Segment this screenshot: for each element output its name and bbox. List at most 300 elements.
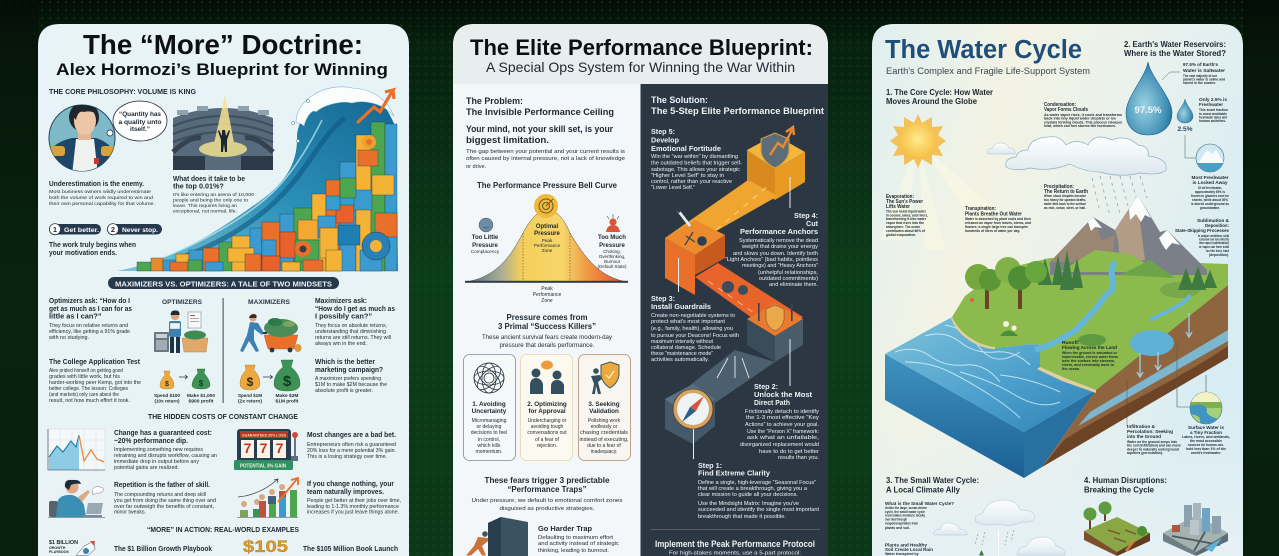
chart: performance pressure bell curve: Choking, bbox=[603, 249, 621, 254]
pill: never stop: 2 bbox=[111, 225, 115, 234]
text: step 3: Create non-negotiable systems to bbox=[651, 313, 735, 319]
callout: freshwater: This scant fraction bbox=[1199, 108, 1228, 112]
title: Elite Performance Blueprint: The Elite Performance Blueprint: bbox=[470, 35, 813, 60]
text: step 2: disorganized replacement would bbox=[740, 442, 819, 448]
text: step 1: Define a single, high-leverage “Seasonal Focus” bbox=[698, 480, 816, 486]
text: surface water tiny fraction: Surface Water is bbox=[1188, 425, 1224, 431]
chart: performance pressure bell curve: Complacency bbox=[471, 249, 500, 254]
text: step 5: “Lower Level Self.” bbox=[651, 185, 695, 191]
text: infiltration and percolation: Infiltration & bbox=[1127, 424, 1155, 430]
card: optimizing for approval: rejection. bbox=[537, 443, 557, 449]
text: peak performance protocol: Implement the Peak Performance Protocol bbox=[655, 539, 815, 549]
text: better marketing campaign: marketing campaign? bbox=[315, 365, 383, 374]
text: locked away bbox=[1191, 175, 1229, 210]
text: maximizers ask: “How do I get as much as bbox=[315, 304, 395, 313]
heading: the solution bbox=[651, 95, 824, 116]
card: avoiding uncertainty: Micromanaging bbox=[472, 418, 507, 424]
heading: primal success killers: 3 Primal “Success Killers” bbox=[498, 322, 596, 331]
text: motivation bbox=[49, 242, 136, 257]
illustration: mountains bbox=[1050, 195, 1207, 278]
title: The More Doctrine bbox=[56, 29, 388, 79]
labels: spend 1M make 2M: $1M profit bbox=[276, 398, 299, 404]
text: sublimation and deposition: into vapor (sublimation) bbox=[1199, 241, 1230, 245]
card: avoiding uncertainty: in control, bbox=[478, 437, 500, 443]
text: repetition bbox=[114, 480, 216, 516]
text: maximizers ask bbox=[315, 296, 395, 347]
text: step 5: Emotional Fortitude bbox=[651, 144, 721, 153]
text: maximizers ask: understanding that diminishing bbox=[315, 329, 386, 335]
text: step 5: control, rather than your reactive bbox=[651, 179, 732, 185]
text: step 3: activities automatically. bbox=[651, 357, 709, 363]
text: peak performance protocol bbox=[655, 539, 815, 556]
title: The Water Cycle bbox=[885, 36, 1090, 76]
illustration: conifers bbox=[1038, 250, 1217, 290]
heading: primal success killers bbox=[482, 313, 612, 349]
heading: performance traps: disguised as productive strategies. bbox=[500, 506, 595, 512]
text: step 4: meetings) and “Heavy Anchors” bbox=[742, 263, 818, 269]
card: avoiding uncertainty: Uncertainty bbox=[472, 408, 507, 415]
labels: spend 1M make 2M: Spend $1M bbox=[238, 393, 262, 398]
text: evaporation: contributes about 86% of bbox=[886, 229, 926, 233]
text: what is small water cycle: What is the Small Water Cycle? bbox=[885, 501, 954, 506]
labels: spend 1M make 2M: Make $2M bbox=[276, 393, 299, 398]
label: optimizers: OPTIMIZERS bbox=[162, 299, 202, 306]
connector lines bbox=[678, 177, 790, 459]
text: step 4: Cut bbox=[806, 219, 819, 228]
text: maximizers ask: They focus on absolute returns, bbox=[315, 323, 387, 329]
text: college application test: result, not how much effort it took. bbox=[49, 398, 130, 404]
icon: glacier circle bbox=[1196, 144, 1224, 173]
label: maximizers: MAXIMIZERS bbox=[248, 299, 290, 306]
text: bad bet: Most changes are a bad bet. bbox=[307, 430, 396, 439]
text: maximizers ask: I possibly can?” bbox=[315, 312, 372, 320]
icon: dagger and bomb bbox=[675, 207, 707, 246]
heading: human disruptions: 4. Human Disruptions: bbox=[1084, 476, 1167, 485]
text: precipitation: water falls back to the surface bbox=[1043, 202, 1086, 206]
card: optimizing for approval: Undercharging or bbox=[528, 418, 567, 424]
text: team improves: leading to 1-1.3% monthly performance bbox=[307, 504, 399, 510]
panel: The Elite Performance Blueprint bbox=[453, 24, 828, 556]
card: avoiding uncertainty: momentum. bbox=[476, 449, 502, 455]
pill: get better: Get better. bbox=[64, 227, 99, 234]
card: avoiding uncertainty: or delaying bbox=[477, 424, 502, 430]
text: precipitation: When cloud droplets become bbox=[1044, 194, 1086, 198]
text: surface water tiny fraction: a Tiny Fraction bbox=[1190, 430, 1222, 436]
text: condensation bbox=[1044, 102, 1122, 128]
text: step 1: succeeded and identify the single most important bbox=[698, 507, 820, 513]
icon: small water drop 2.5 percent: 2.5% bbox=[1177, 126, 1193, 133]
text: step 2: Actions” to achieve your goal. bbox=[745, 422, 819, 428]
text: repetition: The compounding returns and deep skill bbox=[114, 492, 206, 498]
text: step 2: have to do to get better bbox=[759, 449, 819, 455]
text: the problem: biggest limitation. bbox=[466, 135, 549, 146]
text: runoff: Flowing Across the Land bbox=[1062, 345, 1117, 351]
text: team improves bbox=[307, 479, 401, 516]
chart: performance pressure bell curve: Too Little bbox=[472, 235, 499, 241]
callout: freshwater: is most available bbox=[1199, 112, 1227, 116]
callout: saltwater: Water is Saltwater bbox=[1183, 68, 1225, 74]
text: infiltration and percolation: the soil (infiltration) and can move bbox=[1127, 444, 1181, 448]
text: transpiration: hundreds of liters of water per day. bbox=[965, 229, 1020, 233]
text: optimizers ask: efficiency, like getting a 91% grade bbox=[49, 329, 130, 335]
text: step 2: results than you. bbox=[778, 455, 819, 461]
icon: rocket growth playbook: $1 BILLION bbox=[49, 540, 78, 546]
callout: saltwater: stored in the oceans. bbox=[1183, 81, 1216, 85]
text: what is small water cycle bbox=[885, 501, 954, 530]
text: step 2: Step 2: bbox=[754, 382, 778, 391]
text: team improves: If you change nothing, your bbox=[307, 479, 394, 488]
chart: performance pressure bell curve: Zone bbox=[541, 298, 553, 304]
icon: Napoleon portrait bbox=[48, 104, 116, 172]
text: condensation: As water vapor rises, it cools and transforms bbox=[1044, 113, 1122, 117]
text: infiltration and percolation: into the Ground bbox=[1127, 434, 1161, 440]
chart: performance pressure bell curve bbox=[465, 194, 628, 304]
text: evaporation: The Sun's Power bbox=[886, 199, 923, 205]
icon: rocket growth playbook: PLAYBOOK bbox=[49, 550, 69, 554]
heading: water reservoirs: Where is the Water Stored? bbox=[1124, 49, 1226, 58]
text: evaporation: Lifts Water bbox=[886, 204, 910, 210]
icon: slot machine: 7 bbox=[260, 440, 268, 456]
title: The Water Cycle: The Water Cycle bbox=[885, 36, 1082, 64]
card: seeking validation: instead of executing, bbox=[580, 437, 628, 443]
text: step 3: Step 3: bbox=[651, 294, 675, 303]
text: surface water tiny fraction: sources for human use, bbox=[1188, 443, 1224, 447]
text: step 2: Unlock the Most bbox=[754, 390, 813, 399]
text: step 2: Use the “Person X” framework: bbox=[747, 429, 819, 435]
heading: small water cycle: 3. The Small Water Cycle: bbox=[886, 476, 979, 485]
card: optimizing for approval: of a fear of bbox=[535, 437, 560, 443]
text: step 3: collateral damage. Schedule bbox=[651, 345, 721, 351]
text: step 4: Step 4: bbox=[794, 211, 818, 220]
text: better marketing campaign: Which is the better bbox=[315, 357, 375, 366]
text: infiltration and percolation: Water on the ground seeps into bbox=[1127, 440, 1178, 444]
text: the problem: The Invisible Performance Ceiling bbox=[466, 106, 614, 117]
text: precipitation: as rain, snow, sleet, or hail. bbox=[1044, 206, 1086, 210]
labels: spend 100 make 1000: Make $1,000 bbox=[187, 393, 215, 398]
text: sublimation and deposition: (deposition). bbox=[1209, 253, 1229, 257]
text: step 5: Develop bbox=[651, 136, 680, 144]
text: locked away: approximately 69% is bbox=[1195, 190, 1225, 194]
text: locked away: Most Freshwater bbox=[1192, 175, 1229, 181]
card: seeking validation: 3. Seeking bbox=[588, 401, 620, 408]
text: step 4: Systematically remove the dead bbox=[739, 238, 818, 244]
text: optimizers ask: little as I can?” bbox=[49, 312, 102, 320]
callout: thought bubble quote: itself.” bbox=[130, 126, 150, 133]
text: top 0.01 percent: What does it take to be bbox=[173, 174, 245, 183]
text: evaporation: vapor that rises into the bbox=[886, 221, 924, 225]
text: top 0.01 percent: leave. This requires living an bbox=[173, 203, 237, 209]
text: maximizers ask: always win in the end. bbox=[315, 341, 367, 347]
divider: mindset columns bbox=[223, 298, 224, 403]
heading: core cycle bbox=[886, 88, 993, 106]
callout: saltwater: The vast majority of our bbox=[1183, 74, 1217, 78]
text: top 0.01 percent: people and being the only one to bbox=[173, 198, 248, 204]
text: optimizers ask: Optimizers ask: “How do I bbox=[49, 296, 130, 305]
icon: small money bags optimizer: $ bbox=[165, 381, 169, 388]
icon: large money bags maximizer: $ bbox=[247, 375, 254, 389]
text: locked away: sheets, while about 30% bbox=[1192, 198, 1229, 202]
text: runoff: Runoff: bbox=[1062, 340, 1080, 346]
title: The More Doctrine: Alex Hormozi’s Blueprint for Winning bbox=[56, 60, 388, 79]
icon: optimizer with calculator and box bbox=[154, 310, 208, 353]
icon: slot machine: POTENTIAL 3% GAIN bbox=[240, 464, 286, 470]
text: repetition: you get from doing the same thing over and bbox=[114, 498, 216, 504]
text: what is small water cycle: plants and soil. bbox=[885, 526, 910, 530]
heading: human disruptions: Breaking the Cycle bbox=[1084, 486, 1155, 494]
text: step 4: (unhelpful relationships, bbox=[758, 270, 818, 276]
text: plants and healthy soil: Water transpired by bbox=[885, 552, 919, 556]
heading: core philosophy: THE CORE PHILOSOPHY: VOLUME IS KING bbox=[49, 89, 197, 96]
text: bad bet: 20% loss for a mere potential 3% gain. bbox=[307, 448, 396, 454]
text: precipitation: Precipitation: bbox=[1044, 184, 1074, 190]
text: evaporation bbox=[886, 194, 928, 237]
icon: slot machine: GUARANTEED 20% LOSS bbox=[242, 434, 286, 438]
text: go harder trap: Go Harder Trap bbox=[538, 524, 592, 533]
heading: primal success killers: pressure that derails performance. bbox=[500, 343, 595, 349]
labels: spend 1M make 2M: (2x return) bbox=[238, 398, 262, 404]
card: seeking validation: Polishing work bbox=[588, 418, 621, 424]
text: locked away: Of all freshwater, bbox=[1198, 186, 1222, 190]
text: optimizers ask bbox=[48, 296, 132, 341]
icon: sun bbox=[880, 114, 995, 250]
heading: hidden costs: THE HIDDEN COSTS OF CONSTANT CHANGE bbox=[148, 412, 298, 421]
callout: saltwater bbox=[1162, 62, 1225, 85]
icon: disrupted land diorama bbox=[1084, 502, 1150, 556]
text: transpiration: Transpiration: bbox=[965, 206, 996, 212]
heading pill: maximizers vs optimizers: MAXIMIZERS VS. OPTIMIZERS: A TALE OF TWO MINDSETS bbox=[115, 280, 332, 288]
pill: get better bbox=[49, 224, 101, 235]
card: avoiding uncertainty: decisions to feel bbox=[471, 430, 507, 436]
title: The More Doctrine: The “More” Doctrine: bbox=[83, 29, 363, 60]
pill: never stop bbox=[107, 224, 162, 235]
icon: large money bags maximizer bbox=[240, 360, 300, 391]
text: step 1: Use the Mindsight Matrix: Imagine you've bbox=[698, 501, 799, 507]
card: seeking validation: inadequacy. bbox=[591, 449, 617, 455]
text: book launch: The $105 Million Book Launch bbox=[303, 546, 398, 553]
labels: spend 100 make 1000: Spend $100 bbox=[154, 393, 180, 398]
text: sublimation and deposition: Deposition: bbox=[1205, 223, 1229, 229]
card: avoiding uncertainty: 1. Avoiding bbox=[472, 401, 506, 408]
chart: performance pressure bell curve: (Default State) bbox=[597, 264, 627, 269]
text: guaranteed cost bbox=[114, 428, 217, 471]
text: surface water tiny fraction: hold less than 1% of the bbox=[1186, 447, 1226, 451]
text: step 4: and slows you down. Identify both bbox=[733, 251, 818, 257]
text: top 0.01 percent: the top 0.01%? bbox=[173, 182, 224, 190]
text: go harder trap bbox=[538, 524, 619, 554]
text: infiltration and percolation bbox=[1127, 380, 1181, 455]
text: runoff bbox=[1062, 340, 1118, 371]
illustration: arena crowd bbox=[173, 95, 273, 170]
text: sublimation and deposition: State-Skipping Processes bbox=[1175, 228, 1229, 234]
text: top 0.01 percent bbox=[173, 174, 254, 214]
text: surface water tiny fraction: the most accessible bbox=[1190, 439, 1222, 443]
callout: thought bubble quote: “Quantity has bbox=[119, 111, 161, 118]
pill: never stop: Never stop. bbox=[122, 227, 158, 234]
labels: spend 100 make 1000: (10x return) bbox=[154, 398, 180, 404]
card: avoiding uncertainty: which kills bbox=[478, 443, 501, 449]
text: top 0.01 percent: It's like entering an arena of 10,000 bbox=[173, 192, 254, 198]
text: evaporation: transforming it into water bbox=[886, 217, 926, 221]
text: the problem: or drive. bbox=[466, 164, 487, 170]
text: infiltration and percolation: deeper to naturally underground bbox=[1127, 447, 1179, 451]
heading: human disruptions bbox=[1084, 476, 1167, 494]
text: runoff: impermeable, excess water flows bbox=[1062, 355, 1118, 359]
text: team improves: team naturally improves. bbox=[307, 487, 384, 496]
text: the problem: Your mind, not your skill set, is your bbox=[466, 124, 613, 135]
text: bad bet bbox=[307, 430, 396, 460]
heading: water reservoirs: 2. Earth's Water Reservoirs: bbox=[1124, 40, 1226, 49]
icon: slot machine: 7 bbox=[276, 440, 284, 456]
text: guaranteed cost: Change has a guaranteed cost: bbox=[114, 428, 212, 437]
text: college application test: Alex prided himself on getting good bbox=[49, 368, 123, 374]
icon: slot machine bbox=[234, 429, 298, 470]
pill: get better: 1 bbox=[53, 225, 57, 234]
heading: small water cycle: A Local Climate Ally bbox=[886, 486, 961, 494]
text: motivation: your motivation ends. bbox=[49, 250, 117, 257]
card: optimizing for approval: conversations out bbox=[527, 430, 567, 436]
text: college application test: The College Application Test bbox=[49, 357, 140, 366]
heading: core cycle: 1. The Core Cycle: How Water bbox=[886, 88, 993, 97]
text: locked away: is stored underground as bbox=[1191, 202, 1229, 206]
text: sublimation and deposition: or vapor can form solid bbox=[1199, 245, 1229, 249]
text: step 5: “Higher Level Self” to stay in bbox=[651, 173, 724, 179]
text: the problem bbox=[466, 95, 625, 170]
text: underestimation: Most business owners wildly underestimate bbox=[49, 189, 151, 195]
text: step 3: maximum intensity without bbox=[651, 339, 714, 345]
title: The Water Cycle: Earth's Complex and Fragile Life-Support System bbox=[886, 65, 1090, 76]
heading: primal success killers: These ancient survival fears create modern-day bbox=[482, 335, 612, 341]
callout: freshwater bbox=[1199, 97, 1228, 123]
text: optimizers ask: They focus on relative returns and bbox=[49, 323, 128, 329]
heading: more in action: “MORE” IN ACTION: REAL-WORLD EXAMPLES bbox=[147, 525, 299, 534]
figure: 105 dollars: $105 bbox=[243, 537, 288, 556]
text: maximizers ask: returns are still returns. They will bbox=[315, 335, 391, 341]
text: evaporation: atmosphere. The ocean bbox=[886, 225, 921, 229]
text: guaranteed cost: ~20% performance dip. bbox=[114, 436, 188, 445]
icon: small money bags optimizer: $ bbox=[199, 379, 204, 388]
icon: person pushing stone block bbox=[466, 517, 528, 556]
heading: bell curve: The Performance Pressure Bell Curve bbox=[477, 181, 618, 190]
text: underestimation: their own personal capability for that volume. bbox=[49, 201, 155, 207]
text: underestimation: both the volume of work required to win and bbox=[49, 195, 153, 201]
text: condensation: Condensation: bbox=[1044, 102, 1076, 108]
text: repetition: over far outweigh the benefits of constant, bbox=[114, 504, 214, 510]
diagram: staircase path bbox=[665, 127, 805, 444]
text: transpiration: Plants Breathe Out Water bbox=[965, 212, 1022, 218]
chart: performance pressure bell curve: Performance bbox=[534, 243, 561, 248]
text: the problem: often caused by internal pressure, not a lack of knowledge bbox=[466, 156, 625, 162]
icon: person at laptop bbox=[48, 480, 105, 518]
chart: performance dip line bbox=[48, 429, 105, 470]
text: sublimation and deposition bbox=[1175, 218, 1230, 257]
text: surface water tiny fraction: Lakes, rivers, and wetlands, bbox=[1182, 435, 1230, 439]
heading: small water cycle bbox=[886, 476, 979, 494]
chart: performance pressure bell curve: Peak bbox=[542, 238, 553, 243]
heading: water reservoirs bbox=[1124, 40, 1226, 58]
text: precipitation: The Return to Earth bbox=[1044, 189, 1088, 195]
text: step 1: that will create a breakthrough, giving you a bbox=[698, 486, 807, 492]
text: step 3: to pursue your Deacons! Focus with bbox=[651, 333, 739, 339]
text: step 2: Direct Path bbox=[754, 398, 790, 407]
text: condensation: heat, which can fuel storms like hurricanes. bbox=[1044, 124, 1116, 128]
card: optimizing for approval bbox=[520, 354, 572, 460]
text: college application test: better college. The lesson: Colleges bbox=[49, 386, 128, 392]
icon: small money bags optimizer bbox=[160, 369, 210, 389]
chart: performance pressure bell curve: Too Much bbox=[598, 235, 626, 241]
heading: primal success killers: Pressure comes from bbox=[506, 313, 588, 322]
text: step 4 bbox=[725, 211, 819, 288]
heading pill: maximizers vs optimizers bbox=[108, 277, 339, 289]
text: step 5: sabotage. This allows your strategic bbox=[651, 167, 741, 173]
icon: guardrail shield bbox=[758, 303, 793, 331]
text: evaporation: global evaporation. bbox=[886, 233, 916, 237]
text: step 2: Frictionally detach to identify bbox=[745, 409, 820, 415]
text: guaranteed cost: potential gains are realized. bbox=[114, 465, 179, 471]
text: condensation: crystals forming clouds. This process releases bbox=[1044, 120, 1122, 124]
text: infiltration and percolation: aquifers (percolation). bbox=[1127, 451, 1163, 455]
chart: performance pressure bell curve: Pressure bbox=[599, 243, 626, 249]
icon: surface water globe bbox=[1177, 342, 1222, 426]
text: step 3: protect what's most important bbox=[651, 319, 726, 325]
callout: freshwater: Only 2.5% is bbox=[1199, 97, 1227, 103]
text: plants and healthy soil: Soil Create Local Rain bbox=[885, 547, 933, 552]
diagram: landscape cross-section bbox=[885, 195, 1228, 478]
text: bad bet: This is a losing strategy over time. bbox=[307, 454, 387, 460]
chart: performance pressure bell curve: Zone bbox=[542, 248, 553, 253]
text: what is small water cycle: recirculates moisture locally bbox=[885, 514, 925, 518]
text: repetition: minor tweaks. bbox=[114, 510, 146, 516]
heading: core cycle: Moves Around the Globe bbox=[886, 97, 978, 106]
text: step 5: Step 5: bbox=[651, 127, 675, 136]
text: step 4: “Light Anchors” (bad habits, pointless bbox=[725, 257, 819, 263]
text: step 1 bbox=[698, 461, 820, 520]
text: what is small water cycle: over land through bbox=[885, 517, 907, 521]
chart: performance pressure bell curve: Pressure bbox=[534, 231, 561, 237]
heading: performance traps: These fears trigger 3 predictable bbox=[484, 476, 610, 485]
icon: rocket growth playbook: GROWTH bbox=[49, 546, 66, 550]
icon: rain clouds bbox=[1006, 137, 1166, 216]
panel: The More Doctrine bbox=[38, 24, 409, 556]
text: precipitation: too heavy for upward drafts, bbox=[1044, 198, 1086, 202]
text: sublimation and deposition: Sublimation & bbox=[1197, 218, 1229, 224]
text: what is small water cycle: cycle, the small water cycle bbox=[885, 510, 925, 514]
text: better marketing campaign: absolute profit is greater. bbox=[315, 388, 373, 394]
text: optimizers ask: with no studying. bbox=[48, 335, 89, 341]
icon: slot machine: 7 bbox=[244, 440, 252, 456]
heading: performance traps bbox=[472, 476, 623, 512]
text: step 3: these “maintenance mode” bbox=[651, 351, 713, 357]
text: step 4: Performance Anchors bbox=[740, 227, 818, 236]
text: underestimation: Underestimation is the enemy. bbox=[49, 179, 144, 188]
text: step 2 bbox=[740, 382, 820, 461]
text: college application test: grades with little work, but his bbox=[49, 374, 120, 380]
text: optimizers ask: get as much as I can for as bbox=[49, 304, 132, 313]
icon: city diorama bbox=[1163, 503, 1228, 556]
text: maximizers ask: Maximizers ask: bbox=[315, 296, 367, 305]
callout: freshwater: freshwater lakes and bbox=[1199, 116, 1227, 120]
text: guaranteed cost: Implementing something new requires bbox=[114, 447, 203, 453]
text: transpiration bbox=[965, 206, 1032, 233]
card: seeking validation: due to a fear of bbox=[587, 443, 621, 449]
icon: large water drop 97.5 percent: 97.5% bbox=[1135, 105, 1162, 116]
text: precipitation bbox=[1043, 184, 1088, 210]
text: better marketing campaign: $1M to make $2M because the bbox=[315, 382, 387, 388]
heading: the solution: The Solution: bbox=[651, 95, 708, 105]
text: go harder trap: thinking, leading to burnout. bbox=[538, 548, 609, 554]
text: better marketing campaign: A maximizer prefers spending bbox=[315, 376, 381, 382]
icon: rocket growth playbook bbox=[49, 540, 95, 556]
chart: performance pressure bell curve: Performance bbox=[533, 292, 562, 298]
